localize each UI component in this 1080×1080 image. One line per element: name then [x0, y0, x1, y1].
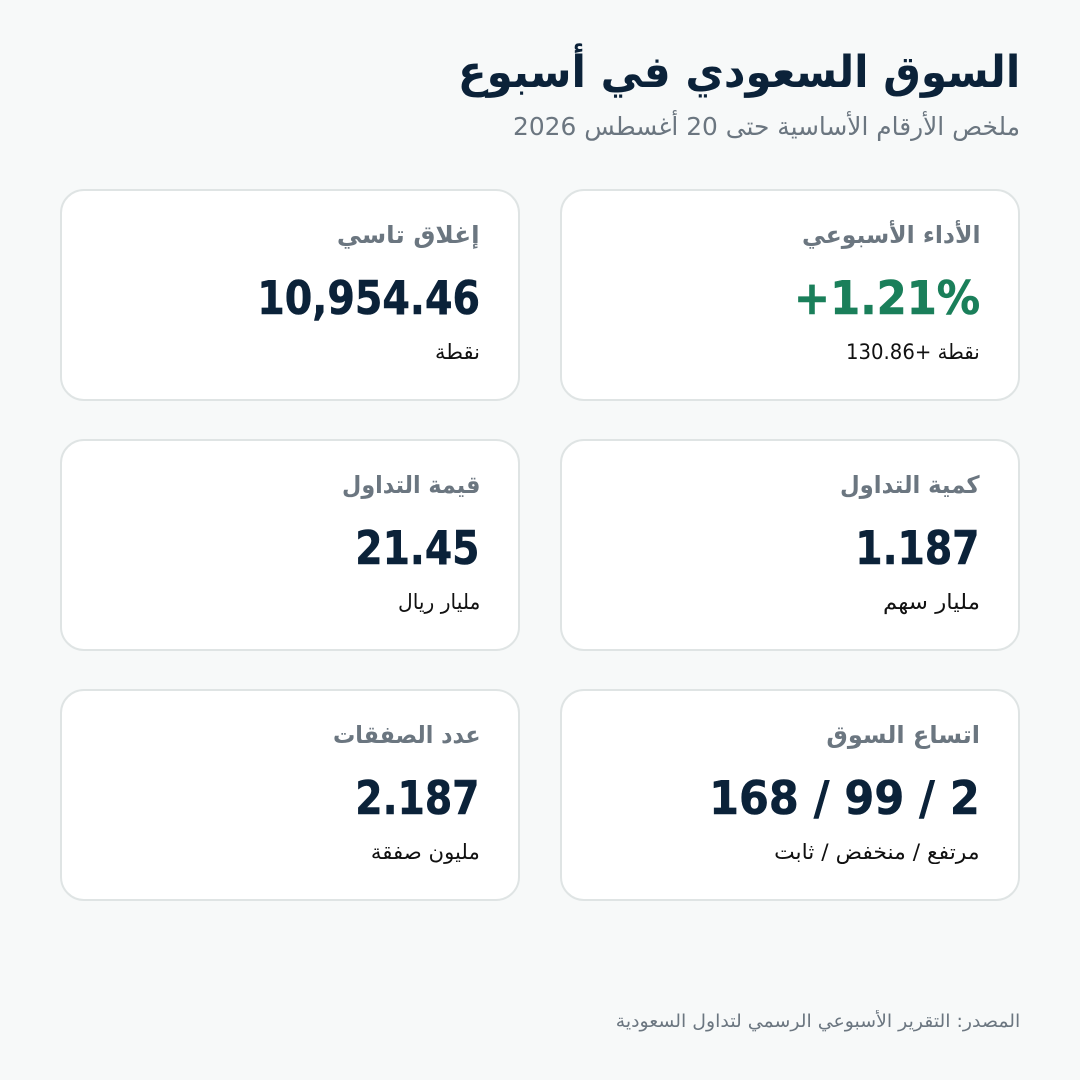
label: trades: عدد الصفقات	[332, 721, 480, 749]
title: السوق السعودي في أسبوع	[458, 47, 1020, 98]
label: close: إغلاق تاسي	[337, 221, 480, 249]
sub-label: up down unchanged: مرتفع / منخفض / ثابت	[775, 840, 980, 864]
sub-label: billion shares: مليار سهم	[883, 590, 980, 614]
value: close: 10,954.46	[257, 271, 480, 325]
panel: trading value	[60, 439, 520, 651]
panel: market breadth	[560, 689, 1020, 901]
value: trading value: 21.45	[356, 521, 480, 575]
sub-label: million trades: مليون صفقة	[371, 840, 480, 864]
sub-label: points change: نقطة +130.86	[846, 340, 980, 364]
label: breadth: اتساع السوق	[826, 721, 980, 749]
panel: Thursday close	[60, 189, 520, 401]
panel: number of trades	[60, 689, 520, 901]
value: trades: 2.187	[356, 771, 480, 825]
sub-label: billion riyals: مليار ريال	[398, 590, 480, 614]
value: breadth: 2 / 99 / 168	[709, 771, 980, 825]
panel: trading volume	[560, 439, 1020, 651]
source footnote: المصدر: التقرير الأسبوعي الرسمي لتداول السعودية	[615, 1011, 1020, 1032]
value: weekly performance: +1.21%	[794, 271, 980, 325]
label: trading value: قيمة التداول	[342, 471, 480, 499]
value: volume: 1.187	[856, 521, 980, 575]
subtitle: ملخص الأرقام الأساسية حتى 20 أغسطس 2026	[513, 112, 1020, 141]
panel: weekly performance	[560, 189, 1020, 401]
label: weekly performance: الأداء الأسبوعي	[802, 221, 980, 249]
label: volume: كمية التداول	[840, 471, 980, 499]
sub-label: points: نقطة	[435, 340, 480, 364]
